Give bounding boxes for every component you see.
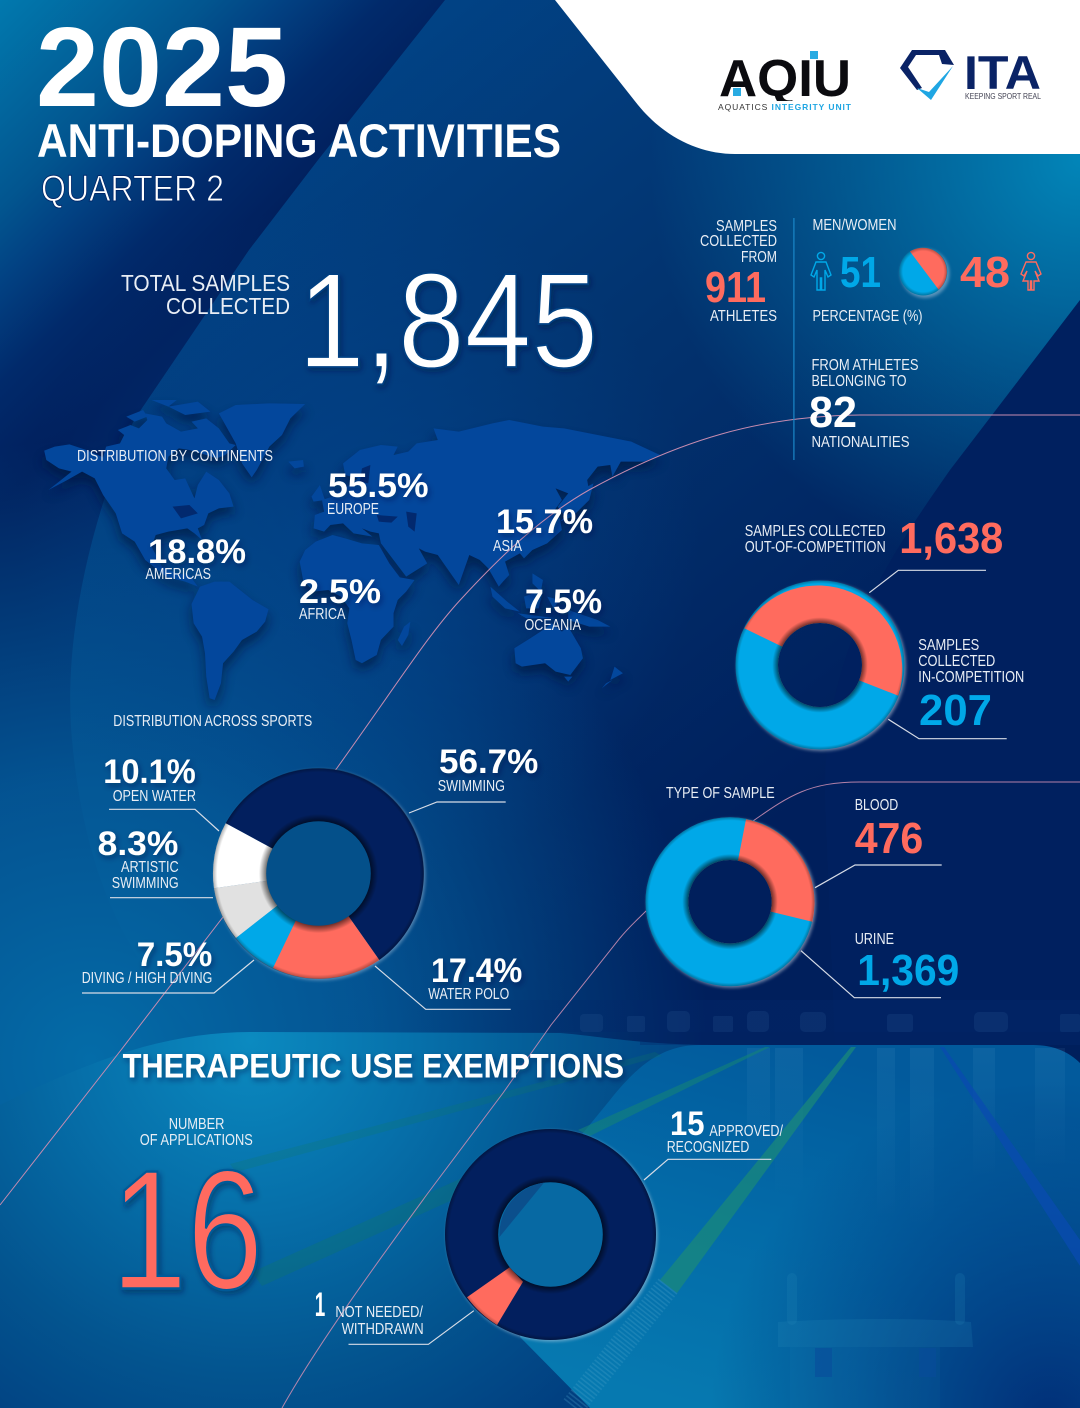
- continents labels: DISTRIBUTION BY CONTINENTS: [77, 448, 273, 465]
- total samples collected: COLLECTED: [166, 293, 290, 319]
- stadium silhouette: [400, 1000, 1080, 1045]
- TUE labels: 15: [670, 1105, 704, 1143]
- logo: AQIU: AQUATICS INTEGRITY UNIT: [718, 102, 852, 112]
- pie: men women: [899, 248, 950, 298]
- nationalities panel: NATIONALITIES: [812, 434, 910, 451]
- men women panel: PERCENTAGE (%): [812, 308, 922, 325]
- title: [36, 4, 561, 209]
- logo: ITA: KEEPING SPORT REAL: [965, 92, 1041, 101]
- continents labels: OCEANIA: [524, 617, 581, 634]
- competition labels: IN-COMPETITION: [918, 669, 1024, 686]
- sports labels: WATER POLO: [428, 986, 509, 1003]
- sports labels: SWIMMING: [438, 778, 505, 795]
- continents labels: [77, 448, 602, 634]
- sample type labels: TYPE OF SAMPLE: [666, 785, 775, 802]
- competition labels: 207: [919, 686, 992, 735]
- total samples collected: 1,845: [298, 245, 598, 396]
- men women panel: 48: [960, 248, 1010, 297]
- vertical divider: [793, 218, 794, 460]
- heading: therapeutic use exemptions: THERAPEUTIC USE EXEMPTIONS: [123, 1048, 624, 1086]
- sports labels: 17.4%: [431, 952, 522, 990]
- sports callouts: [82, 802, 511, 1009]
- continents labels: 7.5%: [525, 583, 602, 621]
- sports labels: SWIMMING: [112, 875, 179, 892]
- title: 2025: [36, 4, 288, 130]
- number of applications: NUMBER: [169, 1116, 224, 1133]
- curved pink line: [0, 415, 1080, 1205]
- nationalities panel: [809, 357, 918, 451]
- number of applications: OF APPLICATIONS: [140, 1132, 253, 1149]
- sample type labels: 1,369: [857, 946, 959, 995]
- sports labels: 10.1%: [103, 753, 196, 791]
- men women panel: [811, 217, 1041, 325]
- sports labels: 7.5%: [137, 936, 212, 974]
- number of applications: 16: [111, 1136, 263, 1326]
- sports labels: ARTISTIC: [121, 859, 179, 876]
- icon: woman: [1021, 252, 1041, 290]
- continents labels: 18.8%: [148, 533, 246, 571]
- total samples collected: TOTAL SAMPLES: [121, 270, 290, 296]
- sports labels: DIVING / HIGH DIVING: [82, 970, 212, 987]
- logo: ITA: ITA: [964, 46, 1041, 99]
- TUE labels: NOT NEEDED/: [335, 1304, 423, 1321]
- competition labels: COLLECTED: [918, 653, 995, 670]
- competition labels: SAMPLES: [918, 637, 979, 654]
- athletes panel: SAMPLES: [716, 218, 777, 235]
- competition labels: [745, 514, 1024, 739]
- continents labels: 55.5%: [328, 467, 428, 505]
- TUE labels: [315, 1105, 783, 1344]
- competition labels: 1,638: [899, 514, 1003, 563]
- starting block: [778, 1273, 973, 1408]
- sample type labels: [666, 785, 959, 998]
- logo: ITA: [900, 46, 1041, 101]
- sports labels: OPEN WATER: [113, 788, 196, 805]
- athletes panel: COLLECTED: [700, 233, 777, 250]
- TUE labels: APPROVED/: [709, 1123, 783, 1140]
- competition labels: OUT-OF-COMPETITION: [745, 539, 886, 556]
- nationalities panel: BELONGING TO: [812, 373, 906, 390]
- sports labels: 8.3%: [98, 825, 178, 863]
- athletes panel: ATHLETES: [710, 308, 777, 325]
- nationalities panel: FROM ATHLETES: [812, 357, 918, 374]
- athletes panel: FROM: [741, 249, 777, 266]
- TUE labels: WITHDRAWN: [342, 1321, 424, 1338]
- continents labels: ASIA: [493, 538, 522, 555]
- TUE labels: 1: [315, 1286, 325, 1324]
- logo: AQIU: AQIU: [719, 50, 851, 108]
- athletes panel: 911: [705, 263, 766, 312]
- nationalities panel: 82: [809, 388, 857, 437]
- donut: sports distribution: [213, 768, 426, 980]
- continents labels: 2.5%: [299, 573, 381, 611]
- world map: [44, 400, 660, 707]
- continents labels: AFRICA: [299, 606, 346, 623]
- sports labels: [82, 743, 538, 1003]
- sports heading: DISTRIBUTION ACROSS SPORTS: [113, 713, 312, 730]
- second curved pink line: [282, 782, 1080, 1408]
- donut: competition split: [736, 580, 906, 751]
- title: ANTI-DOPING ACTIVITIES: [37, 114, 561, 167]
- continents labels: 15.7%: [496, 503, 593, 541]
- pool lane ropes: [230, 1047, 1080, 1408]
- pool surface: [520, 1045, 1080, 1408]
- TUE labels: RECOGNIZED: [667, 1139, 749, 1156]
- total samples collected: [121, 245, 598, 396]
- men women panel: MEN/WOMEN: [812, 217, 896, 234]
- icon: man: [811, 252, 831, 290]
- title: QUARTER 2: [41, 168, 224, 209]
- sample type labels: 476: [855, 814, 923, 863]
- athletes panel: [700, 218, 777, 325]
- continents labels: AMERICAS: [146, 566, 211, 583]
- competition labels: SAMPLES COLLECTED: [745, 523, 886, 540]
- sample type labels: BLOOD: [855, 797, 898, 814]
- continents labels: EUROPE: [327, 501, 379, 518]
- sample type labels: URINE: [855, 931, 894, 948]
- donut: TUE outcomes: [445, 1129, 658, 1342]
- donut: type of sample: [646, 817, 816, 988]
- logo corner panel: [555, 0, 1080, 154]
- sports labels: 56.7%: [439, 743, 538, 781]
- men women panel: 51: [840, 248, 881, 297]
